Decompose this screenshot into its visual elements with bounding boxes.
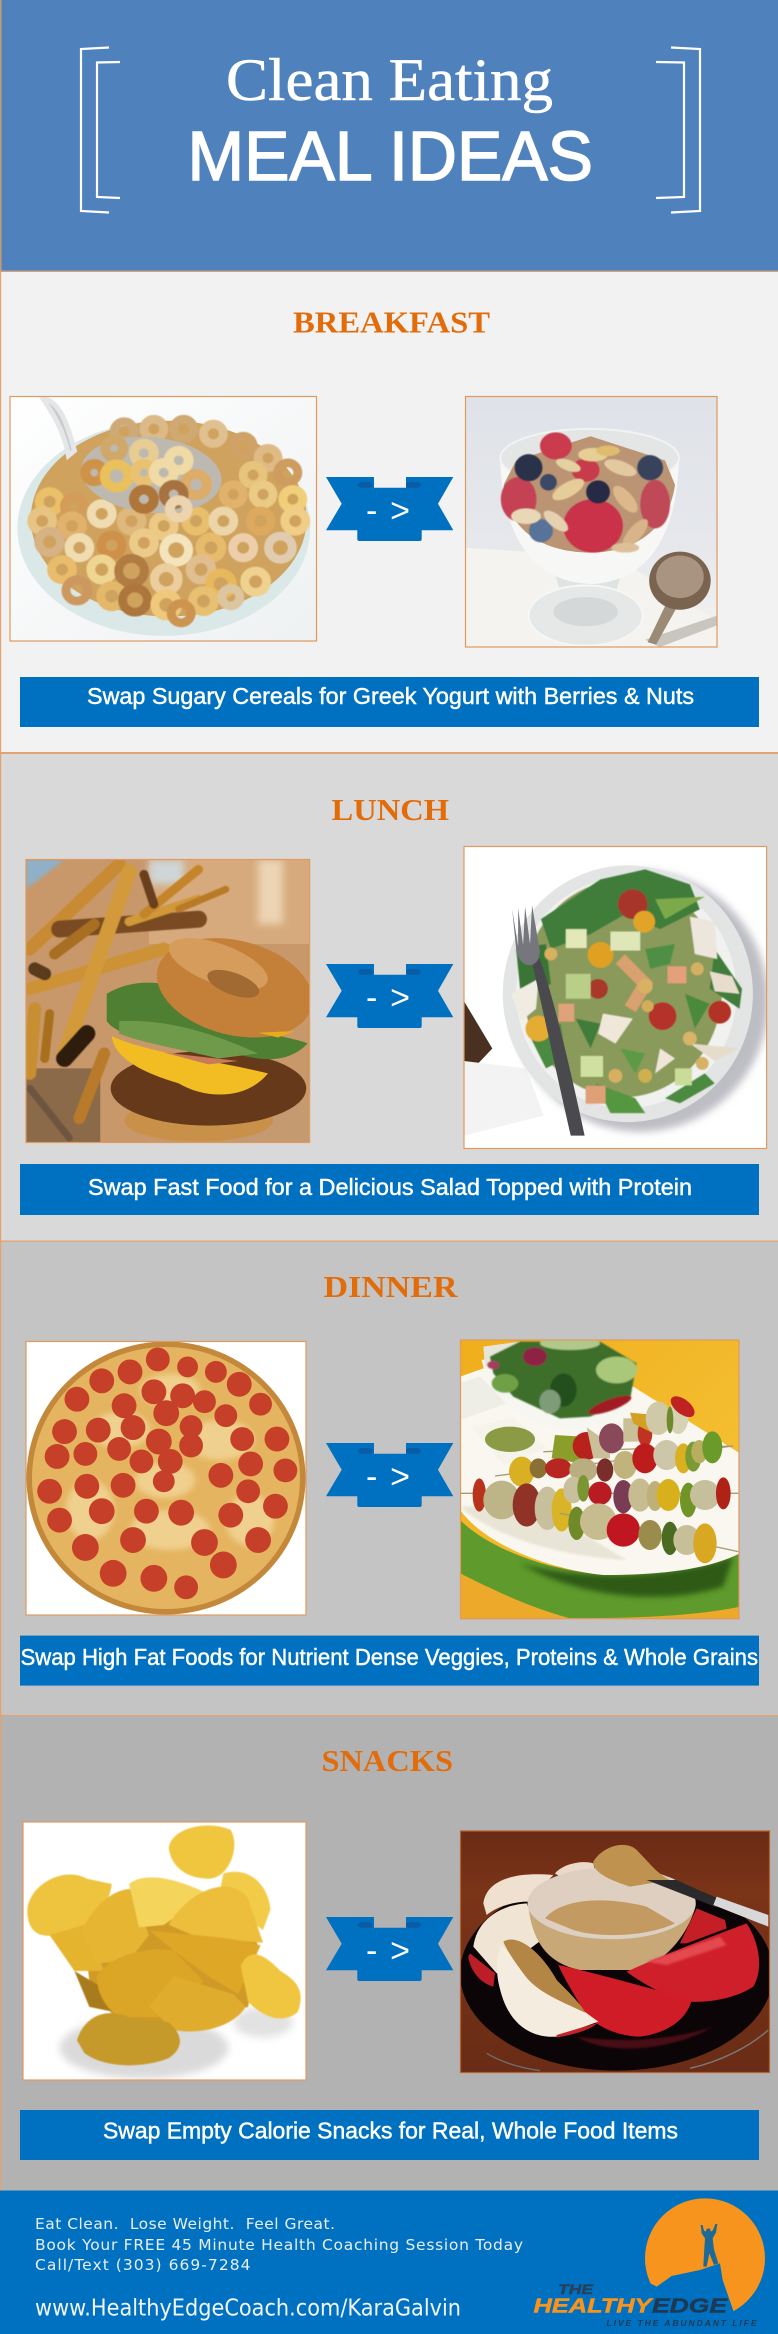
photo frame: burger [26,860,310,1142]
logo: The Healthy Edge: THE [558,2281,594,2297]
caption bar: lunch: Swap Fast Food for a Delicious Salad Topped with Protein [88,1174,692,1200]
text: call to action: Eat Clean. Lose Weight. Feel Great. [35,2215,335,2233]
photo frame: salad [464,846,767,1148]
title: MEAL IDEAS: MEAL IDEAS [188,117,593,195]
icon: arrow ribbon lunch: -> [366,979,410,1017]
panel: footer [0,2190,778,2334]
photo frame: chips [23,1822,306,2080]
photo frame: cereal [10,396,316,641]
caption bar: snacks: Swap Empty Calorie Snacks for Real, Whole Food Items [103,2118,678,2144]
heading: SNACKS: SNACKS [322,1743,453,1778]
logo: The Healthy Edge: EDGE [652,2296,728,2318]
logo: The Healthy Edge [534,2198,765,2334]
photo: apple slices with peanut butter [461,1832,769,2072]
photo: vegetable kabobs and salad [461,1340,738,1618]
photo frame: pizza [26,1342,306,1615]
caption bar: dinner [20,1636,759,1686]
photo: greek yogurt with berries and nuts [466,397,716,646]
panel: dinner background [0,1241,778,1716]
photo frame: apples [460,1831,770,2072]
heading: DINNER: DINNER [324,1269,458,1304]
caption bar: breakfast: Swap Sugary Cereals for Greek Yogurt with Berries & Nuts [87,683,694,709]
text: call to action: Call/Text (303) 669-7284 [35,2256,250,2274]
panel: snacks background [0,1716,778,2191]
photo: salad topped with protein [464,847,766,1148]
logo: The Healthy Edge: HEALTHY [534,2296,654,2318]
title: Clean Eating: Clean Eating [226,47,553,113]
caption bar: lunch [20,1164,759,1215]
heading: LUNCH: LUNCH [332,792,449,827]
caption bar: dinner: Swap High Fat Foods for Nutrient Dense Veggies, Proteins & Whole Grains [20,1644,758,1670]
heading: BREAKFAST: BREAKFAST [293,304,490,340]
caption bar: breakfast [20,677,759,727]
photo: burger and fries [26,860,309,1142]
logo: The Healthy Edge: LIVE THE ABUNDANT LIFE [606,2318,757,2328]
caption bar: snacks [20,2110,759,2160]
photo: pepperoni pizza [26,1342,306,1614]
text: website: www.HealthyEdgeCoach.com/KaraGalvin [35,2296,461,2322]
icon: arrow ribbon dinner: -> [366,1458,410,1496]
text: call to action: Book Your FREE 45 Minute Health Coaching Session Today [35,2236,523,2254]
icon: arrow ribbon breakfast: -> [366,492,410,530]
panel: breakfast background [0,272,778,753]
photo frame: kabobs [460,1340,739,1619]
icon: arrow ribbon breakfast [326,477,453,541]
icon: arrow ribbon dinner [326,1443,453,1507]
photo: potato chips [24,1822,306,2080]
icon: right bracket [656,48,700,212]
icon: left bracket [81,48,120,212]
icon: arrow ribbon snacks [326,1917,453,1981]
photo: bowl of sugary cereal [10,397,311,636]
panel: header [0,0,778,272]
photo frame: yogurt [466,396,717,647]
icon: arrow ribbon lunch [326,964,453,1028]
text: call to action [35,2215,523,2274]
panel: lunch background [0,753,778,1241]
icon: arrow ribbon snacks: -> [366,1932,410,1970]
